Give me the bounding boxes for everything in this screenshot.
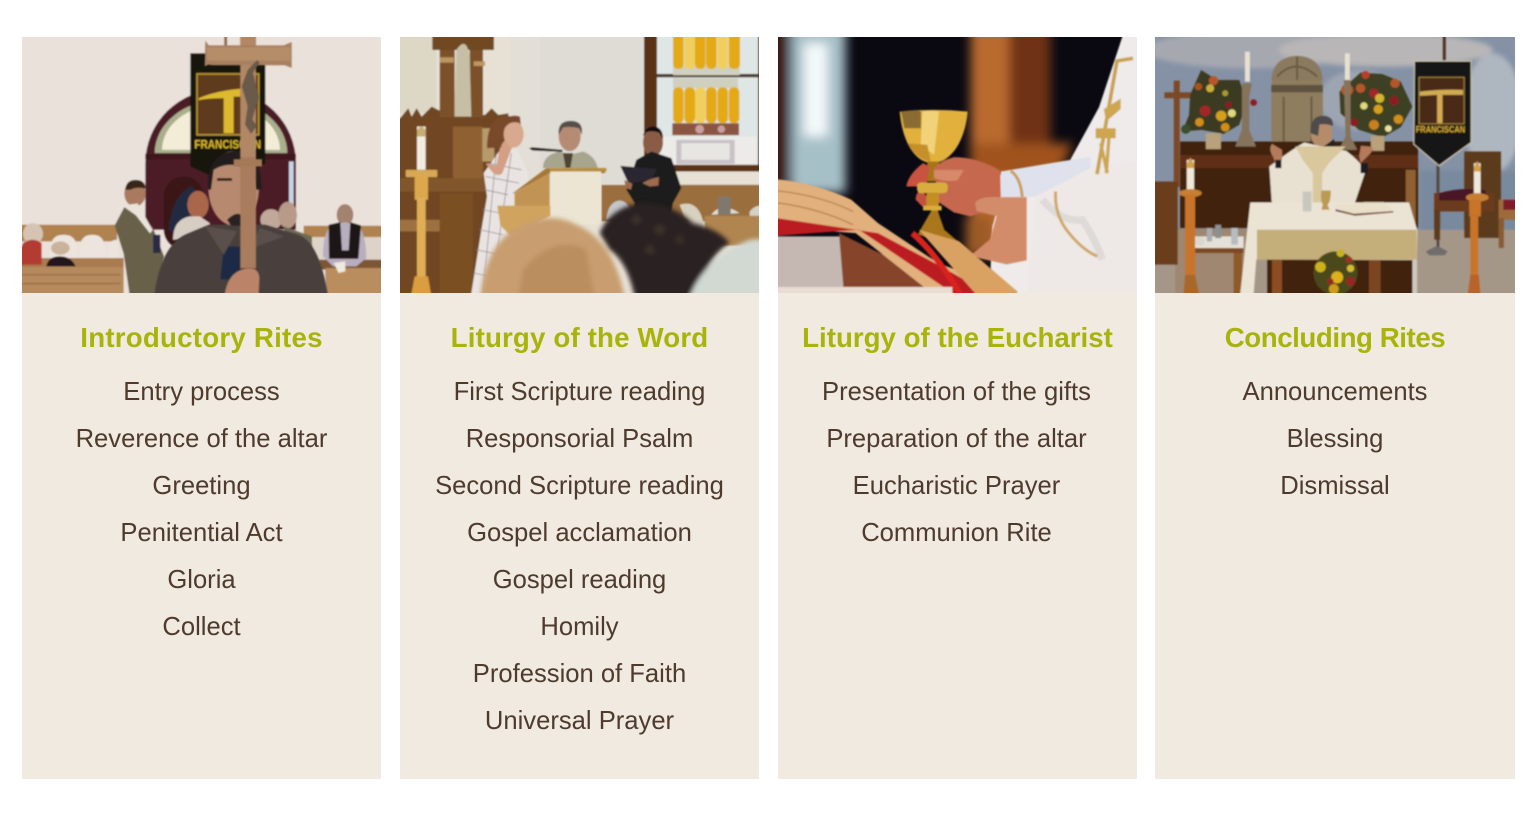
banner	[190, 53, 265, 186]
altar of repose	[1180, 142, 1418, 228]
people behind	[169, 186, 199, 243]
photo: procession with crucifix: FRANCISCAN	[194, 138, 261, 152]
man in vest	[337, 204, 353, 225]
man in grey suit	[124, 181, 146, 206]
photo: lector at the ambo	[400, 37, 759, 293]
photo: priest at the altar	[1155, 37, 1515, 293]
panel: Liturgy of the Eucharist	[778, 37, 1137, 779]
missal	[766, 178, 1018, 304]
wainscot	[601, 185, 773, 221]
congregation left	[23, 223, 43, 244]
woman lector	[470, 150, 530, 300]
list of rites	[435, 378, 724, 735]
wood reredos	[386, 107, 508, 303]
list of rites: Reverence of the altar	[76, 425, 327, 453]
chair	[1464, 152, 1501, 238]
list of rites: First Scripture reading	[454, 378, 705, 406]
list of rites: Preparation of the altar	[826, 425, 1087, 453]
table with cruets	[1193, 246, 1243, 253]
list of rites: Blessing	[1287, 425, 1383, 453]
list of rites: Greeting	[152, 472, 251, 500]
list of rites	[1242, 378, 1427, 500]
altar flowers	[1313, 251, 1358, 295]
banner	[1414, 61, 1471, 166]
flowers right	[1340, 73, 1412, 137]
list of rites: Announcements	[1243, 378, 1427, 406]
list of rites: Homily	[540, 613, 619, 641]
list of rites: Eucharistic Prayer	[853, 472, 1060, 500]
candle right and stand	[1474, 163, 1481, 195]
man reading	[643, 129, 663, 157]
list of rites	[76, 378, 327, 641]
list of rites: Presentation of the gifts	[822, 378, 1091, 406]
ambo	[497, 168, 606, 236]
heading: Liturgy of the Eucharist	[802, 322, 1113, 353]
cross	[1174, 81, 1180, 187]
candle left and stand	[1187, 160, 1194, 190]
list of rites: Communion Rite	[861, 519, 1052, 547]
list of rites	[822, 378, 1091, 547]
list of rites: Entry process	[123, 378, 280, 406]
list of rites: Second Scripture reading	[435, 472, 724, 500]
photo: chalice held over missal	[778, 37, 1137, 293]
tabernacle	[1271, 56, 1323, 147]
sacred vessels and book	[1303, 191, 1311, 211]
panel: Introductory Rites	[22, 37, 381, 779]
list of rites: Responsorial Psalm	[466, 425, 693, 453]
flowers left	[1182, 70, 1247, 134]
list of rites: Collect	[162, 613, 241, 641]
panel: Concluding Rites	[1155, 37, 1515, 779]
photo: procession with crucifix	[22, 37, 381, 293]
foreground man	[154, 151, 329, 300]
list of rites: Gospel acclamation	[467, 519, 692, 547]
chalice and hands	[900, 110, 1027, 264]
candlesticks	[1245, 52, 1250, 82]
heading: Liturgy of the Word	[451, 322, 708, 353]
heads in foreground	[480, 203, 773, 306]
heading: Introductory Rites	[80, 322, 323, 353]
seats and vase	[606, 200, 630, 220]
photo: priest at the altar: FRANCISCAN	[1416, 125, 1465, 135]
chasuble	[989, 27, 1152, 306]
heading: Concluding Rites	[1225, 322, 1445, 353]
left side wood	[1142, 181, 1178, 265]
list of rites: Profession of Faith	[473, 660, 686, 688]
candle	[417, 127, 426, 170]
hand	[224, 268, 259, 300]
altar	[1267, 256, 1414, 303]
list of rites: Gloria	[167, 566, 236, 594]
window	[644, 23, 771, 171]
man behind ambo	[559, 122, 581, 151]
processional cross	[205, 30, 292, 268]
panel: Liturgy of the Word	[400, 37, 759, 779]
floor	[1142, 230, 1526, 306]
list of rites: Dismissal	[1280, 472, 1390, 500]
priest	[1311, 119, 1332, 148]
list of rites: Penitential Act	[120, 519, 283, 547]
banner stand	[1443, 27, 1446, 63]
list of rites: Gospel reading	[493, 566, 666, 594]
list of rites: Universal Prayer	[485, 707, 674, 735]
